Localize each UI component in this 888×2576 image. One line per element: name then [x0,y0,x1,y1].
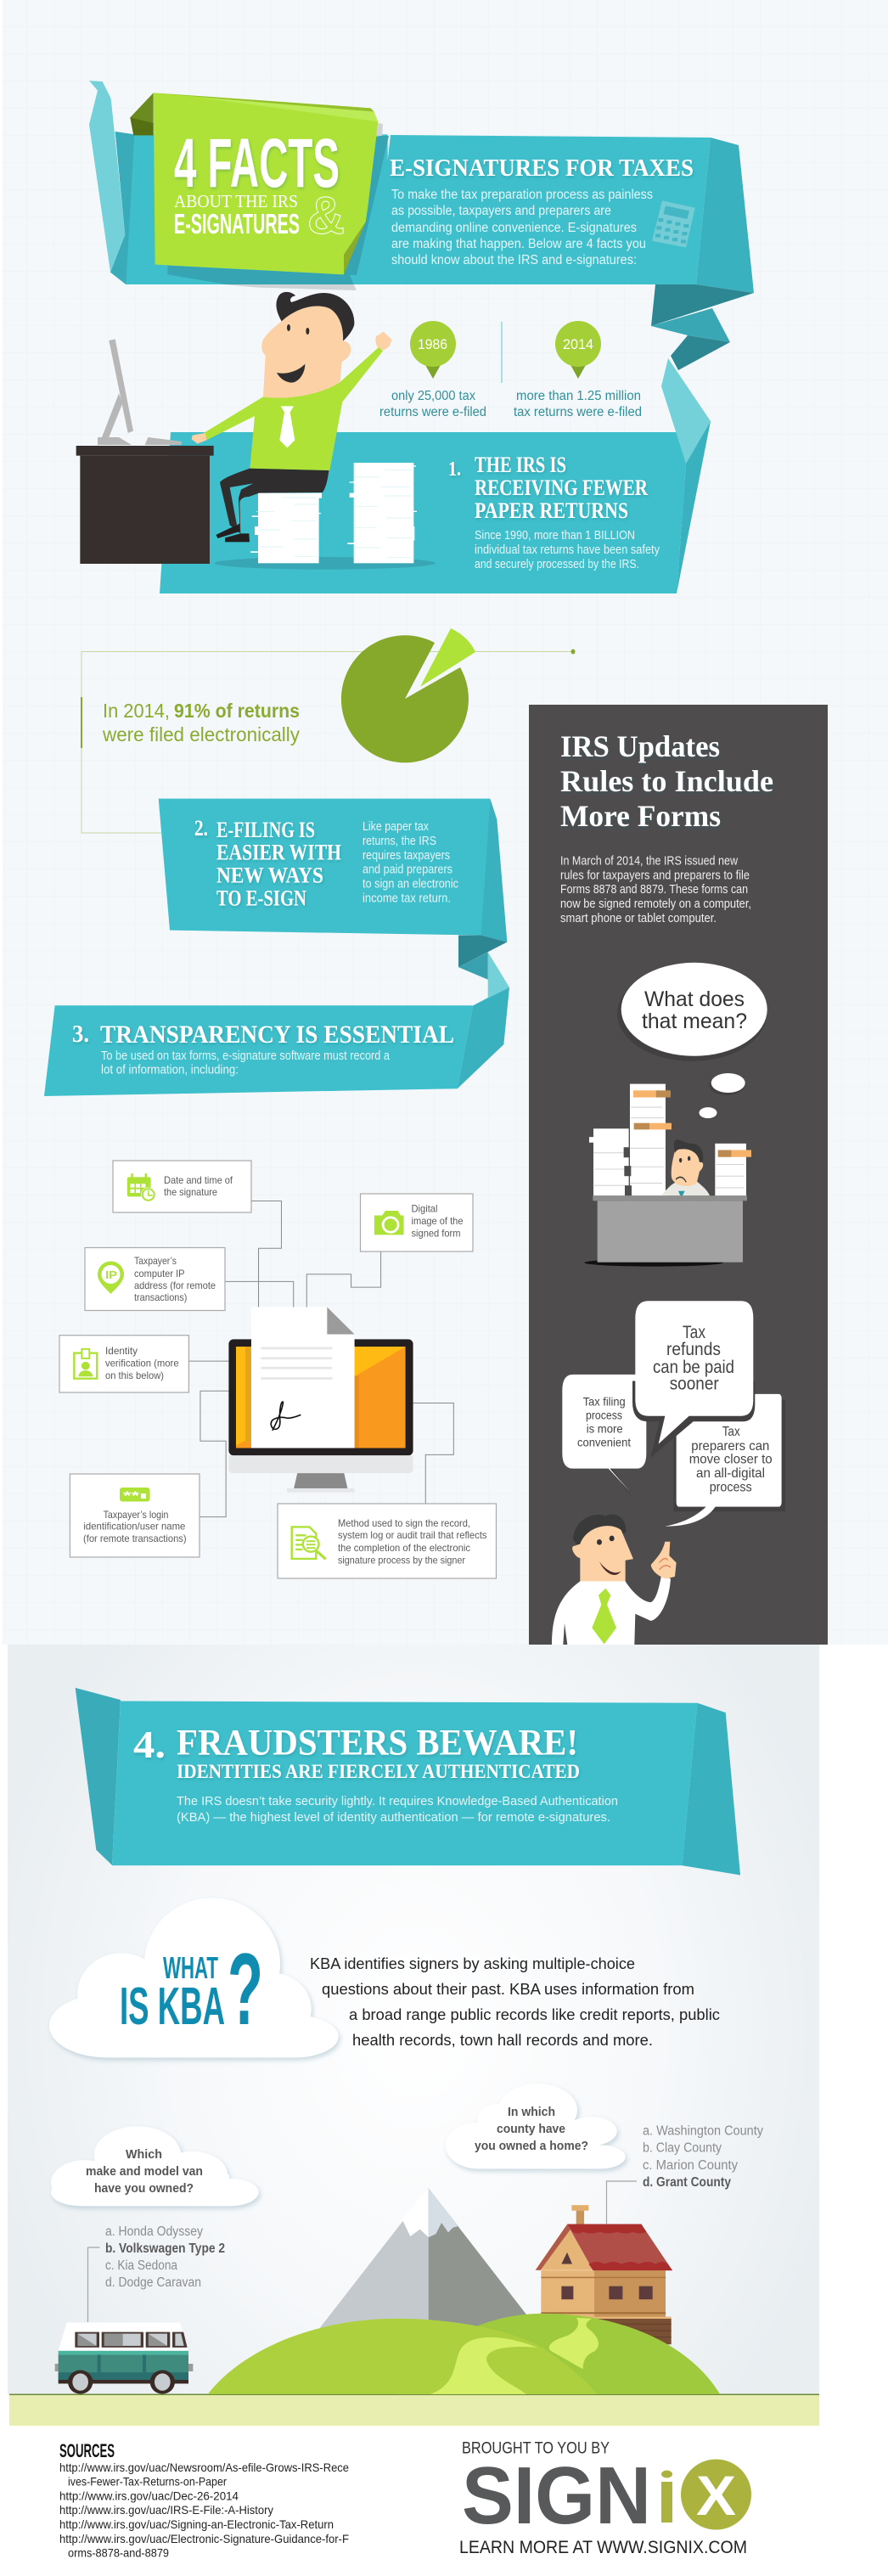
bubble text: refunds [653,1323,734,1394]
fact 2 heading: EASIER WITH [216,841,341,865]
fact 1 heading: RECEIVING FEWER [475,475,648,500]
icon: password field [120,1488,149,1502]
callout: login: (for remote transactions) [83,1533,187,1544]
panel heading: More Forms [560,799,721,833]
bubble text: convenient: Tax filing [583,1395,626,1409]
callout: digital image: signed form [411,1227,460,1239]
tie [279,406,295,447]
pin: 2014: 2014 [563,336,593,352]
fact 4 heading: IDENTITIES ARE FIERCELY AUTHENTICATED [177,1761,580,1782]
background: grid paper [3,0,888,1645]
section 1 ribbon banner [160,358,711,593]
fact 4 body: (KBA) — the highest level of identity authentication — for remote e-signatures. [177,1810,610,1825]
illustration: worker behind paper stacks [584,1084,751,1267]
icon: ip pin [98,1262,124,1294]
title: e-signatures: E-SIGNATURES [174,208,300,239]
house [536,2205,672,2344]
fact 2 body: to sign an electronic [363,877,458,891]
pie caption: In 2014, [103,700,170,722]
fact 2 heading: NEW WAYS [216,863,323,888]
panel body text [560,854,751,925]
title: about the irs: ABOUT THE IRS [174,191,298,211]
fact 4 body: The IRS doesn’t take security lightly. It requires Knowledge-Based Authentication [177,1794,618,1808]
bubble text: refunds: refunds [666,1340,721,1359]
callout: ip address: Taxpayer’s [134,1255,177,1267]
logo: signix [462,2450,751,2541]
callout: identity verification [59,1336,188,1392]
county answer options: c. Marion County [643,2158,738,2173]
callout: method: the completion of the electronic [338,1542,470,1554]
van answer options: a. Honda Odyssey [105,2224,203,2239]
bubble text: preparers: move closer to [689,1453,773,1467]
bubble: preparers [665,1394,785,1527]
fact 3 body: lot of information, including: [101,1063,239,1077]
callout: date and time [113,1161,251,1212]
van answer options: b. Volkswagen Type 2 [105,2241,225,2256]
bubble text: preparers: an all-digital [696,1466,765,1481]
callout: ip address [85,1248,225,1311]
icon: id badge [74,1349,97,1379]
background: section 4 sky [8,1645,819,2394]
cloud question: county: In which [508,2105,555,2119]
callout: date and time: Date and time of [164,1174,233,1186]
logo: signix: X [696,2464,736,2527]
panel heading: Rules to Include [560,764,773,798]
bubble text: refunds: Tax [683,1323,705,1342]
thought bubble: what does that mean: What does [644,987,745,1011]
callout: method: Method used to sign the record, [338,1517,470,1529]
fact 1 heading: 1. [448,458,461,481]
panel body text: In March of 2014, the IRS issued new [560,854,738,868]
callout: method [278,1504,496,1578]
header ribbon banner [89,81,754,370]
cloud question: van [51,2126,259,2206]
fact 3 heading: 3. [72,1021,89,1048]
cloud question: van: have you owned? [94,2181,194,2196]
bubble text: convenient: convenient [577,1435,631,1448]
face and hair [261,292,354,397]
fact 1 body [475,529,660,571]
panel body text: Forms 8878 and 8879. These forms can [560,883,748,897]
callout: digital image [360,1194,473,1251]
sources list: http://www.irs.gov/uac/Signing-an-Electronic-Tax-Return [59,2517,334,2531]
pie chart: 91 percent [341,628,475,762]
caption: 1986: only 25,000 tax [391,389,475,403]
title: ampersand outline: & [307,187,345,245]
icon: password field: ** [123,1488,140,1502]
kba explanation text: health records, town hall records and more. [352,2032,653,2049]
bubble text: convenient: process [586,1409,622,1422]
fact 1 heading [448,453,648,523]
fact 1 heading: THE IRS IS [475,453,566,477]
thought bubble: what does that mean: that mean? [642,1010,747,1033]
cloud question: county: county have [497,2122,565,2136]
learn more: LEARN MORE AT WWW.SIGNIX.COM [459,2538,747,2557]
callout: ip address: transactions) [134,1291,187,1303]
fact 2 heading: E-FILING IS [216,818,315,842]
callout: login [70,1474,200,1557]
speech bubbles [562,1301,785,1527]
fact 4 body [177,1794,618,1825]
caption: 2014 [514,389,642,419]
fact 1 body: individual tax returns have been safety [475,543,660,557]
fact 4 heading: 4. [133,1723,166,1766]
cloud: what is kba: ? [228,1932,263,2046]
legs [216,469,329,542]
character at desk [76,292,436,570]
callout: digital image: image of the [411,1215,464,1227]
cloud question: van: Which [126,2147,162,2162]
callout: identity verification: on this below) [105,1370,164,1381]
brought to you by: BROUGHT TO YOU BY [462,2440,610,2458]
van answer options [105,2224,225,2290]
sources list: orms-8878-and-8879 [68,2546,169,2560]
sources list [59,2461,349,2560]
pin: 1986: 1986 [418,336,447,352]
sources list: http://www.irs.gov/uac/Dec-26-2014 [59,2489,239,2503]
kba explanation text: a broad range public records like credit reports, public [349,2006,720,2023]
panel: irs updates [529,705,828,1645]
bubble text: convenient [577,1395,631,1448]
worker [661,1139,710,1195]
thought bubble: what does that mean [617,963,767,1118]
paper stacks [215,463,436,570]
bubble text: convenient: is more [587,1421,623,1435]
fact 2 body: returns, the IRS [363,835,436,848]
cloud question: county [446,2084,626,2168]
pin: 2014 [555,321,601,379]
ribbon: fact 2 and fact 3 [44,799,509,1096]
bubble text: preparers: Tax [722,1425,740,1439]
monitor [228,1339,413,1493]
fact 2 heading: TO E-SIGN [216,886,306,910]
van answer options: c. Kia Sedona [105,2258,177,2273]
sources list: ives-Fewer-Tax-Returns-on-Paper [68,2474,227,2488]
fact 4 heading [133,1723,580,1782]
title sticky note [130,93,378,274]
caption: 1986 [379,389,486,419]
intro paragraph: To make the tax preparation process as painless [391,188,653,202]
van answer options: d. Dodge Caravan [105,2275,201,2290]
icon: calculator [652,200,695,248]
cloud question: county: you owned a home? [475,2139,588,2153]
county answer options: d. Grant County [643,2175,731,2190]
character pointing [552,1515,677,1645]
hands [192,332,392,444]
desk [76,446,214,564]
kba explanation text: KBA identifies signers by asking multiple-choice [310,1955,635,1972]
fact 1 body: Since 1990, more than 1 BILLION [475,529,635,543]
county answer options: a. Washington County [643,2124,763,2139]
pie caption [102,700,300,745]
fact 4 ribbon banner [76,1688,740,1876]
pie caption: 91% of returns [174,700,300,722]
sources heading: SOURCES [59,2440,115,2461]
bubble text: preparers [689,1425,773,1495]
intro paragraph [391,188,653,267]
computer with signed document [228,1307,413,1493]
paper stacks [589,1084,746,1195]
callout: ip address: address (for remote [134,1280,216,1291]
desk [593,1195,747,1263]
connector line around pie [81,649,576,833]
callout: login: identification/user name [83,1521,186,1533]
bubble: convenient [562,1375,646,1502]
cloud: what is kba [49,1898,339,2058]
mountain [320,2188,543,2328]
intro paragraph: are making that happen. Below are 4 facts you [391,237,646,251]
pie caption: were filed electronically [102,723,300,745]
icon: calendar and clock [127,1173,155,1201]
kba explanation text: questions about their past. KBA uses information from [322,1981,694,1998]
bubble: refunds [632,1301,755,1458]
fact 3 body [101,1049,391,1077]
callout: digital image: Digital [411,1203,438,1215]
icon: computer monitor [98,339,182,445]
title: 4 facts: 4 FACTS [174,125,340,202]
fact 3 heading: TRANSPARENCY IS ESSENTIAL [100,1021,454,1049]
bubble text: refunds: sooner [670,1374,719,1394]
fact 1 heading: PAPER RETURNS [475,498,628,523]
callout: method: signature process by the signer [338,1555,465,1566]
panel body text: rules for taxpayers and preparers to file [560,869,750,883]
desk shadow [584,1259,723,1267]
kba explanation text [310,1955,720,2049]
county answer options: b. Clay County [643,2141,722,2156]
fact 4 heading: FRAUDSTERS BEWARE! [177,1723,578,1763]
caption: 2014: tax returns were e-filed [514,405,642,419]
icon: camera [374,1211,404,1235]
van [55,2322,193,2394]
connector lines [188,1201,453,1517]
county answer options [643,2124,763,2190]
icon: document with magnifier [292,1527,326,1559]
sources list: http://www.irs.gov/uac/IRS-E-File:-A-History [59,2503,273,2517]
logo: signix: SIGN [462,2450,651,2541]
torso and arms [204,346,383,470]
intro paragraph: demanding online convenience. E-signatures [391,221,637,235]
fact 2 body [363,820,458,905]
bubble text: preparers: preparers can [691,1439,769,1454]
callout: method: system log or audit trail that reflects [338,1529,487,1541]
sources list: http://www.irs.gov/uac/Newsroom/As-efile-Grows-IRS-Rece [59,2461,349,2474]
caption: 1986: returns were e-filed [379,405,486,419]
document [251,1307,355,1448]
fact 2 body: and paid preparers [363,863,452,876]
callout: identity verification: Identity [105,1345,138,1357]
hills with winding road [208,2314,720,2394]
fact 2 heading: 2. [194,816,208,841]
icon: ip pin: IP [105,1268,117,1281]
cloud: what is kba: WHAT [163,1950,218,1985]
heading: e-signatures for taxes: E-SIGNATURES FOR TAXES [390,155,694,182]
fact 2 heading [194,816,341,910]
intro paragraph: should know about the IRS and e-signatures: [391,253,637,267]
bubble text: preparers: process [710,1481,752,1495]
panel heading [560,729,773,833]
bubble text: refunds: can be paid [653,1358,734,1377]
fact 3 body: To be used on tax forms, e-signature software must record a [101,1049,391,1063]
callout: login: Taxpayer’s login [104,1509,168,1521]
panel body text: now be signed remotely on a computer, [560,897,751,911]
callout: identity verification: verification (more [105,1357,179,1369]
fact 2 body: Like paper tax [363,820,430,834]
panel body text: smart phone or tablet computer. [560,912,717,925]
panel heading: IRS Updates [560,729,720,763]
intro paragraph: as possible, taxpayers and preparers are [391,204,611,218]
fact 2 body: requires taxpayers [363,849,450,863]
ground strip [9,2394,819,2426]
fact 1 body: and securely processed by the IRS. [475,558,639,571]
cloud question: van: make and model van [86,2164,203,2179]
caption: 2014: more than 1.25 million [516,389,641,403]
cloud: what is kba: IS KBA [120,1977,225,2036]
pin: 1986 [410,321,456,379]
fact 2 body: income tax return. [363,891,451,905]
callout: ip address: computer IP [134,1268,185,1280]
callout: date and time: the signature [164,1186,217,1198]
sources list: http://www.irs.gov/uac/Electronic-Signature-Guidance-for-F [59,2532,349,2545]
